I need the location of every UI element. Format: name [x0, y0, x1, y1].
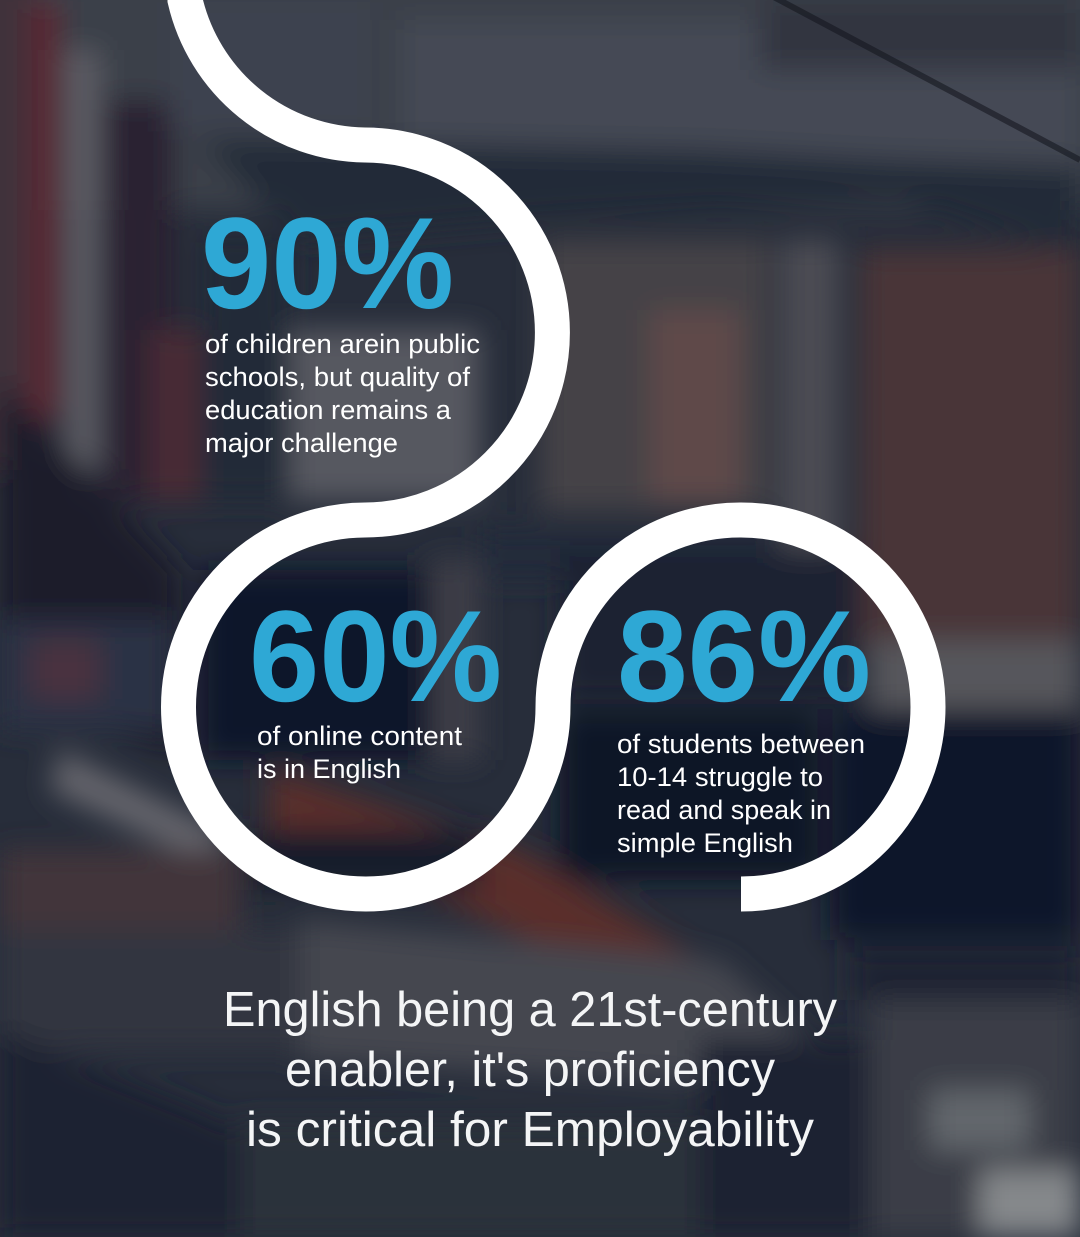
description 86%: simple English	[617, 828, 793, 858]
stat: 60%	[249, 583, 502, 784]
number 86%: 86%	[617, 583, 871, 729]
description 60%: of online content	[257, 721, 463, 751]
number 90%: 90%	[201, 190, 454, 336]
description 86%: read and speak in	[617, 795, 831, 825]
description 86%: 10-14 struggle to	[617, 762, 823, 792]
description 60%: is in English	[257, 754, 401, 784]
closing statement: English being a 21st-century	[223, 983, 837, 1037]
description 90%: education remains a	[205, 395, 451, 425]
description 86%: of students between	[617, 729, 865, 759]
closing statement: enabler, it's proficiency	[285, 1043, 775, 1097]
stat: 90%	[201, 190, 480, 458]
stat: 86%	[617, 583, 871, 858]
closing statement: is critical for Employability	[246, 1103, 815, 1157]
number 60%: 60%	[249, 583, 502, 729]
description 90%: of children arein public	[205, 329, 480, 359]
description 90%: schools, but quality of	[205, 362, 471, 392]
white flowing ribbon	[178, 0, 928, 894]
description 90%: major challenge	[205, 428, 398, 458]
